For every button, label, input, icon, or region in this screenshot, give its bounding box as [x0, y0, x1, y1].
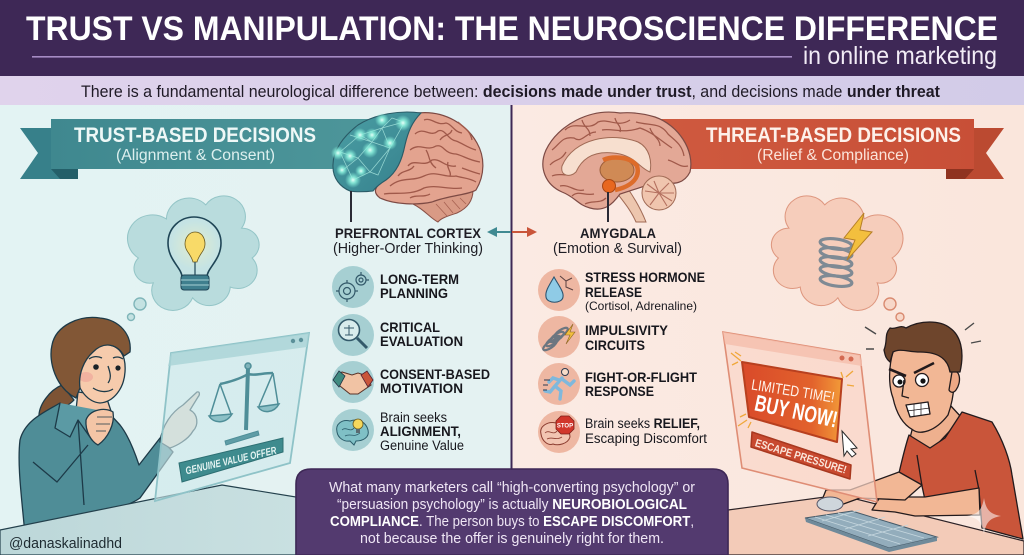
- item: impulsivity circuits: IMPULSIVITY: [585, 322, 669, 338]
- icon: lightning bolt: [844, 213, 872, 260]
- sparkle mark: [967, 498, 1001, 534]
- button: limited time buy now: BUY NOW!: [752, 390, 840, 432]
- hand at chin: [86, 409, 113, 445]
- ribbon: trust heading: (Alignment & Consent): [116, 147, 275, 164]
- item: long-term planning: [332, 266, 459, 308]
- callout: neurobiological compliance: COMPLIANCE. The person buys to ESCAPE DISCOMFORT,: [330, 514, 694, 530]
- intro strip: There is a fundamental neurological difference between: decisions made under trust, and decisions made under threat: [81, 82, 940, 101]
- character: man: [822, 322, 1023, 539]
- panel: threat background: [512, 105, 1024, 555]
- stress marks: [865, 323, 981, 349]
- ponytail: [39, 385, 74, 418]
- item: brain seeks relief: Brain seeks RELIEF,: [585, 416, 700, 431]
- face: [76, 343, 125, 403]
- item: consent-based motivation: CONSENT-BASED: [380, 366, 490, 382]
- thought bubble: spring and lightning: [771, 196, 904, 321]
- hair: [884, 322, 962, 372]
- item: brain seeks alignment: Genuine Value: [380, 438, 464, 453]
- ribbon: trust heading: TRUST-BASED DECISIONS: [74, 124, 316, 147]
- hair: [51, 317, 130, 398]
- callout: neurobiological compliance: What many marketers call “high-converting psychology” or: [329, 480, 695, 496]
- brain: amygdala: [543, 112, 691, 222]
- ribbon: threat heading: THREAT-BASED DECISIONS: [706, 124, 961, 147]
- badge: GENUINE VALUE OFFER: [184, 445, 278, 477]
- center divider: [510, 105, 512, 470]
- item: impulsivity circuits: CIRCUITS: [585, 337, 645, 353]
- ribbon: trust heading: [20, 119, 372, 179]
- item: brain seeks alignment: ALIGNMENT,: [380, 423, 461, 439]
- subtitle: in online marketing: [803, 42, 997, 70]
- shirt: [19, 403, 173, 535]
- face: [890, 345, 954, 432]
- callout: neurobiological compliance: not because the offer is genuinely right for them.: [360, 531, 664, 547]
- label: prefrontal cortex: PREFRONTAL CORTEX: [335, 225, 482, 241]
- item: long-term planning: PLANNING: [380, 285, 448, 301]
- arrow: two-way between brain regions: [487, 227, 537, 237]
- mouse: [817, 497, 843, 511]
- item: fight-or-flight response: RESPONSE: [585, 383, 654, 399]
- desk: left: [0, 485, 296, 555]
- item: brain seeks relief: STOP: [557, 424, 573, 430]
- item: consent-based motivation: MOTIVATION: [380, 380, 463, 396]
- handle credit: @danaskalinadhd: [9, 535, 122, 552]
- ribbon: threat heading: (Relief & Compliance): [757, 147, 909, 164]
- callout: neurobiological compliance: [296, 469, 728, 555]
- item: stress hormone release: RELEASE: [585, 284, 642, 300]
- item: consent-based motivation: [332, 361, 490, 403]
- item: stress hormone release: (Cortisol, Adrenaline): [585, 299, 697, 313]
- ribbon: threat heading: [640, 119, 1004, 179]
- thought bubble: lightbulb idea: [128, 196, 259, 320]
- item: fight-or-flight response: [538, 363, 697, 405]
- character: woman: [19, 317, 199, 535]
- item: impulsivity circuits: [538, 316, 669, 358]
- item: stress hormone release: [538, 269, 705, 313]
- label: amygdala: AMYGDALA: [580, 225, 656, 241]
- label: prefrontal cortex: [333, 225, 483, 257]
- label: prefrontal cortex: (Higher-Order Thinking): [333, 241, 483, 257]
- label: amygdala: (Emotion & Survival): [553, 241, 682, 257]
- badge: [179, 438, 283, 482]
- icon: balance scale: [209, 363, 279, 445]
- item: brain seeks relief: [538, 411, 707, 453]
- brain: prefrontal cortex: [331, 112, 483, 222]
- pointing hand: [160, 392, 199, 448]
- desk: right: [728, 495, 1024, 555]
- item: critical evaluation: [332, 314, 463, 356]
- list: threat traits: [538, 269, 707, 453]
- arm and hands: [872, 488, 980, 516]
- item: brain seeks relief: Escaping Discomfort: [585, 431, 707, 446]
- button: limited time buy now: [742, 362, 842, 442]
- burst marks: [731, 352, 854, 428]
- item: critical evaluation: EVALUATION: [380, 333, 463, 349]
- icon: lightbulb: [168, 217, 221, 290]
- panel: trust background: [0, 105, 512, 555]
- item: fight-or-flight response: FIGHT-OR-FLIGHT: [585, 369, 697, 385]
- item: long-term planning: LONG-TERM: [380, 271, 459, 287]
- item: critical evaluation: CRITICAL: [380, 319, 440, 335]
- list: trust traits: [332, 266, 490, 453]
- neck: [76, 392, 112, 425]
- screen: limited time offer: [723, 332, 877, 502]
- button: limited time buy now: LIMITED TIME!: [750, 377, 836, 406]
- item: stress hormone release: STRESS HORMONE: [585, 269, 705, 285]
- header band: [0, 0, 1024, 76]
- neck: [910, 405, 962, 452]
- screen: genuine value offer: [155, 333, 309, 501]
- item: brain seeks alignment: Brain seeks: [380, 410, 447, 425]
- callout: neurobiological compliance: “persuasion psychology” is actually NEUROBIOLOGICAL: [337, 497, 687, 513]
- shirt: [899, 412, 1023, 539]
- icon: cursor: [842, 431, 857, 457]
- label: amygdala: [553, 225, 682, 257]
- intro strip: [0, 76, 1024, 105]
- item: brain seeks alignment: [332, 409, 464, 453]
- icon: spring: [819, 237, 853, 288]
- button: escape pressure: ESCAPE PRESSURE!: [754, 437, 848, 477]
- keyboard: [805, 510, 937, 552]
